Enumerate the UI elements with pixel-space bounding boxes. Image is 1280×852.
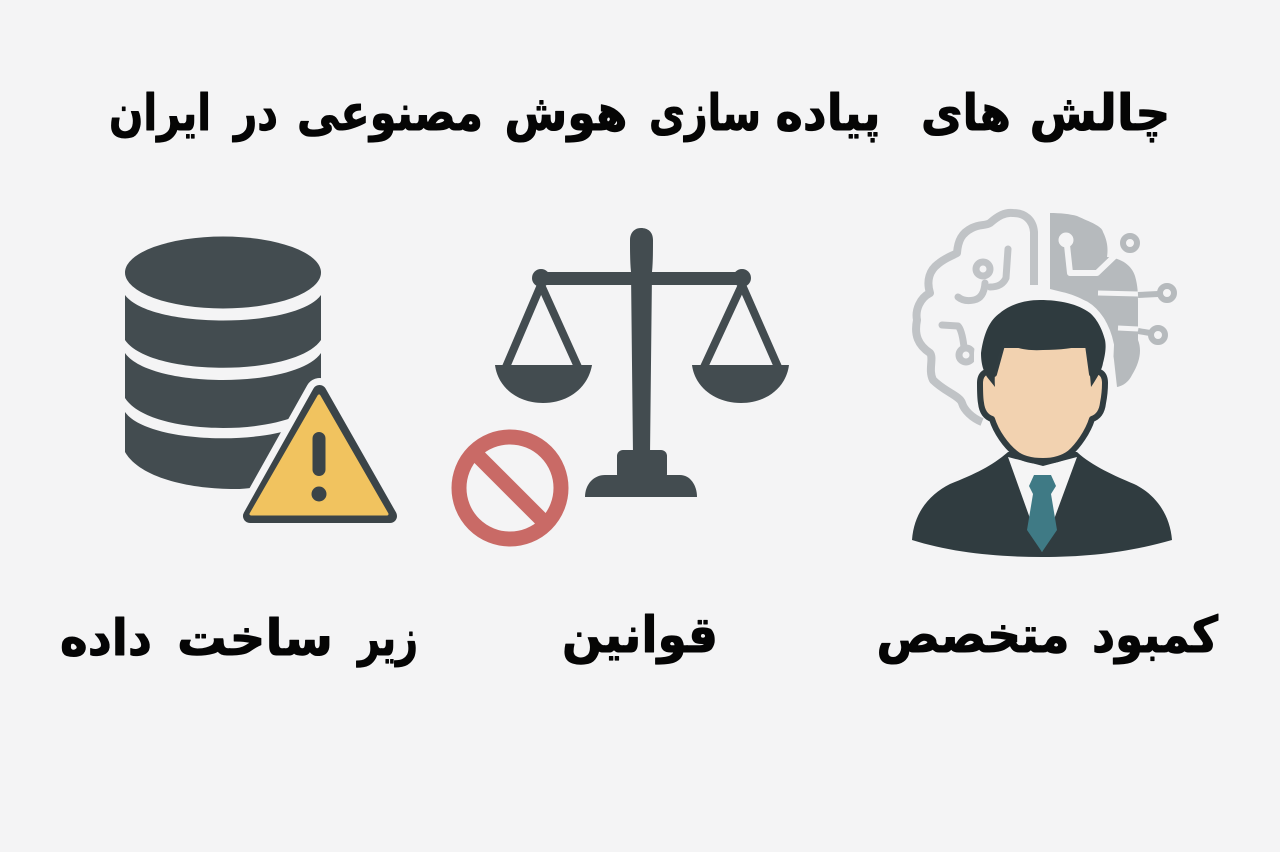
brain left circuits xyxy=(942,249,1008,362)
brain right half xyxy=(1050,213,1140,387)
pole xyxy=(630,228,653,455)
icon: expert with AI brain xyxy=(912,213,1174,557)
title: چالش xyxy=(1030,84,1170,142)
title: هوش xyxy=(504,84,628,143)
right joint xyxy=(733,269,751,287)
left joint xyxy=(532,269,550,287)
title: پیاده xyxy=(776,84,880,142)
head halo xyxy=(979,298,1109,390)
triangle fill xyxy=(251,396,387,514)
necktie xyxy=(1027,475,1057,552)
ring xyxy=(459,437,561,539)
title: مصنوعی xyxy=(297,84,483,143)
title: سازی xyxy=(649,84,761,142)
label: data infrastructure: ساخت xyxy=(177,609,333,667)
triangle halo xyxy=(250,392,390,516)
label: expert shortage xyxy=(876,606,1219,665)
upper layer xyxy=(125,295,321,368)
slash xyxy=(476,454,544,522)
base block xyxy=(617,450,667,480)
exclamation bar xyxy=(312,432,326,476)
triangle border xyxy=(250,392,390,516)
icon: warning triangle xyxy=(250,392,390,516)
label: data infrastructure xyxy=(60,609,418,668)
beam xyxy=(541,272,742,285)
brain right circuits xyxy=(1059,233,1174,342)
suit xyxy=(912,452,1172,557)
icon: prohibited sign xyxy=(459,437,561,539)
label: expert shortage: متخصص xyxy=(876,606,1070,664)
base foot xyxy=(585,475,697,497)
title xyxy=(109,84,1170,143)
hair xyxy=(981,300,1106,387)
icon: database xyxy=(125,236,321,489)
top disk xyxy=(125,236,321,308)
brain left outline xyxy=(916,213,1034,422)
label: expert shortage: کمبود xyxy=(1092,606,1219,665)
left pan xyxy=(495,365,592,403)
face and ears xyxy=(980,345,1105,461)
label: data infrastructure: داده xyxy=(60,609,152,667)
right pan xyxy=(692,365,789,403)
scale strings xyxy=(506,285,778,367)
bottom layer xyxy=(125,412,321,489)
title: ایران xyxy=(109,84,211,143)
label: data infrastructure: زیر xyxy=(356,609,418,668)
title: های xyxy=(921,84,1011,142)
title: در xyxy=(232,84,278,142)
label: laws: قوانین xyxy=(562,606,718,665)
middle layer xyxy=(125,353,321,428)
exclamation dot xyxy=(312,486,326,502)
shirt collar xyxy=(1008,457,1077,552)
icon: scales of justice xyxy=(495,228,789,497)
